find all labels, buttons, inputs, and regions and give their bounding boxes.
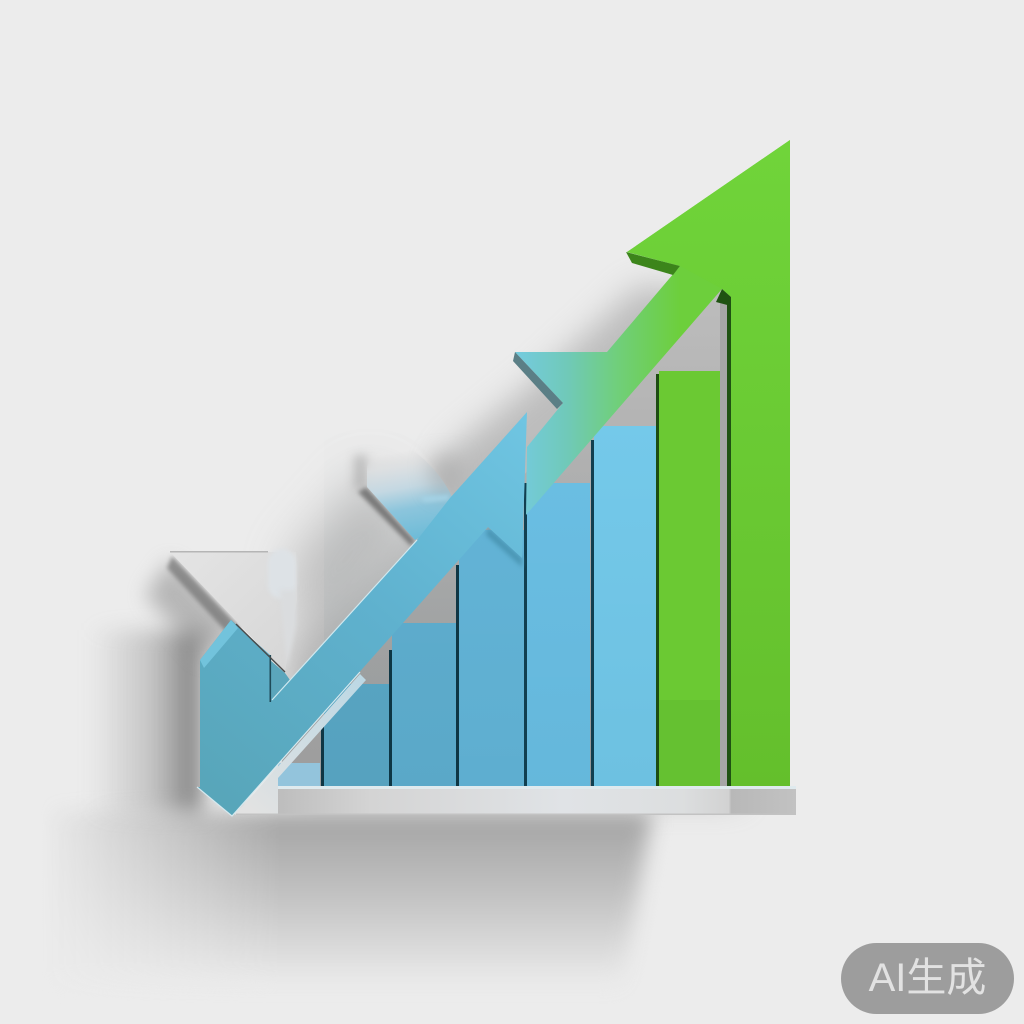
bar 6	[591, 426, 656, 786]
bar 5	[524, 483, 590, 786]
chart illustration	[72, 140, 796, 966]
bar 7: green	[656, 371, 720, 786]
badge: AI generated	[841, 943, 1014, 1014]
rising arrow: upper gradient section with head	[513, 140, 790, 786]
arrowhead: white triangle	[170, 549, 297, 672]
bar 1: tiny light blue	[278, 763, 320, 786]
grey recess behind bars	[282, 280, 728, 790]
bars	[278, 371, 720, 786]
bar 4	[456, 530, 524, 786]
teal sliver under white triangle	[270, 660, 290, 702]
bar 2	[321, 684, 389, 786]
badge: AI generated: AI生成	[869, 956, 986, 1000]
shelf	[232, 786, 796, 814]
light strip under arrow shaft	[235, 674, 366, 815]
rising arrow: lower blue section	[197, 412, 527, 816]
blurred arrowhead: middle	[354, 448, 470, 546]
soft wall shadows	[68, 274, 674, 971]
barb shadow on bar	[486, 527, 522, 567]
bar shading overlay	[324, 420, 656, 786]
bar 3	[389, 623, 456, 786]
shelf bottom edge	[236, 814, 796, 815]
